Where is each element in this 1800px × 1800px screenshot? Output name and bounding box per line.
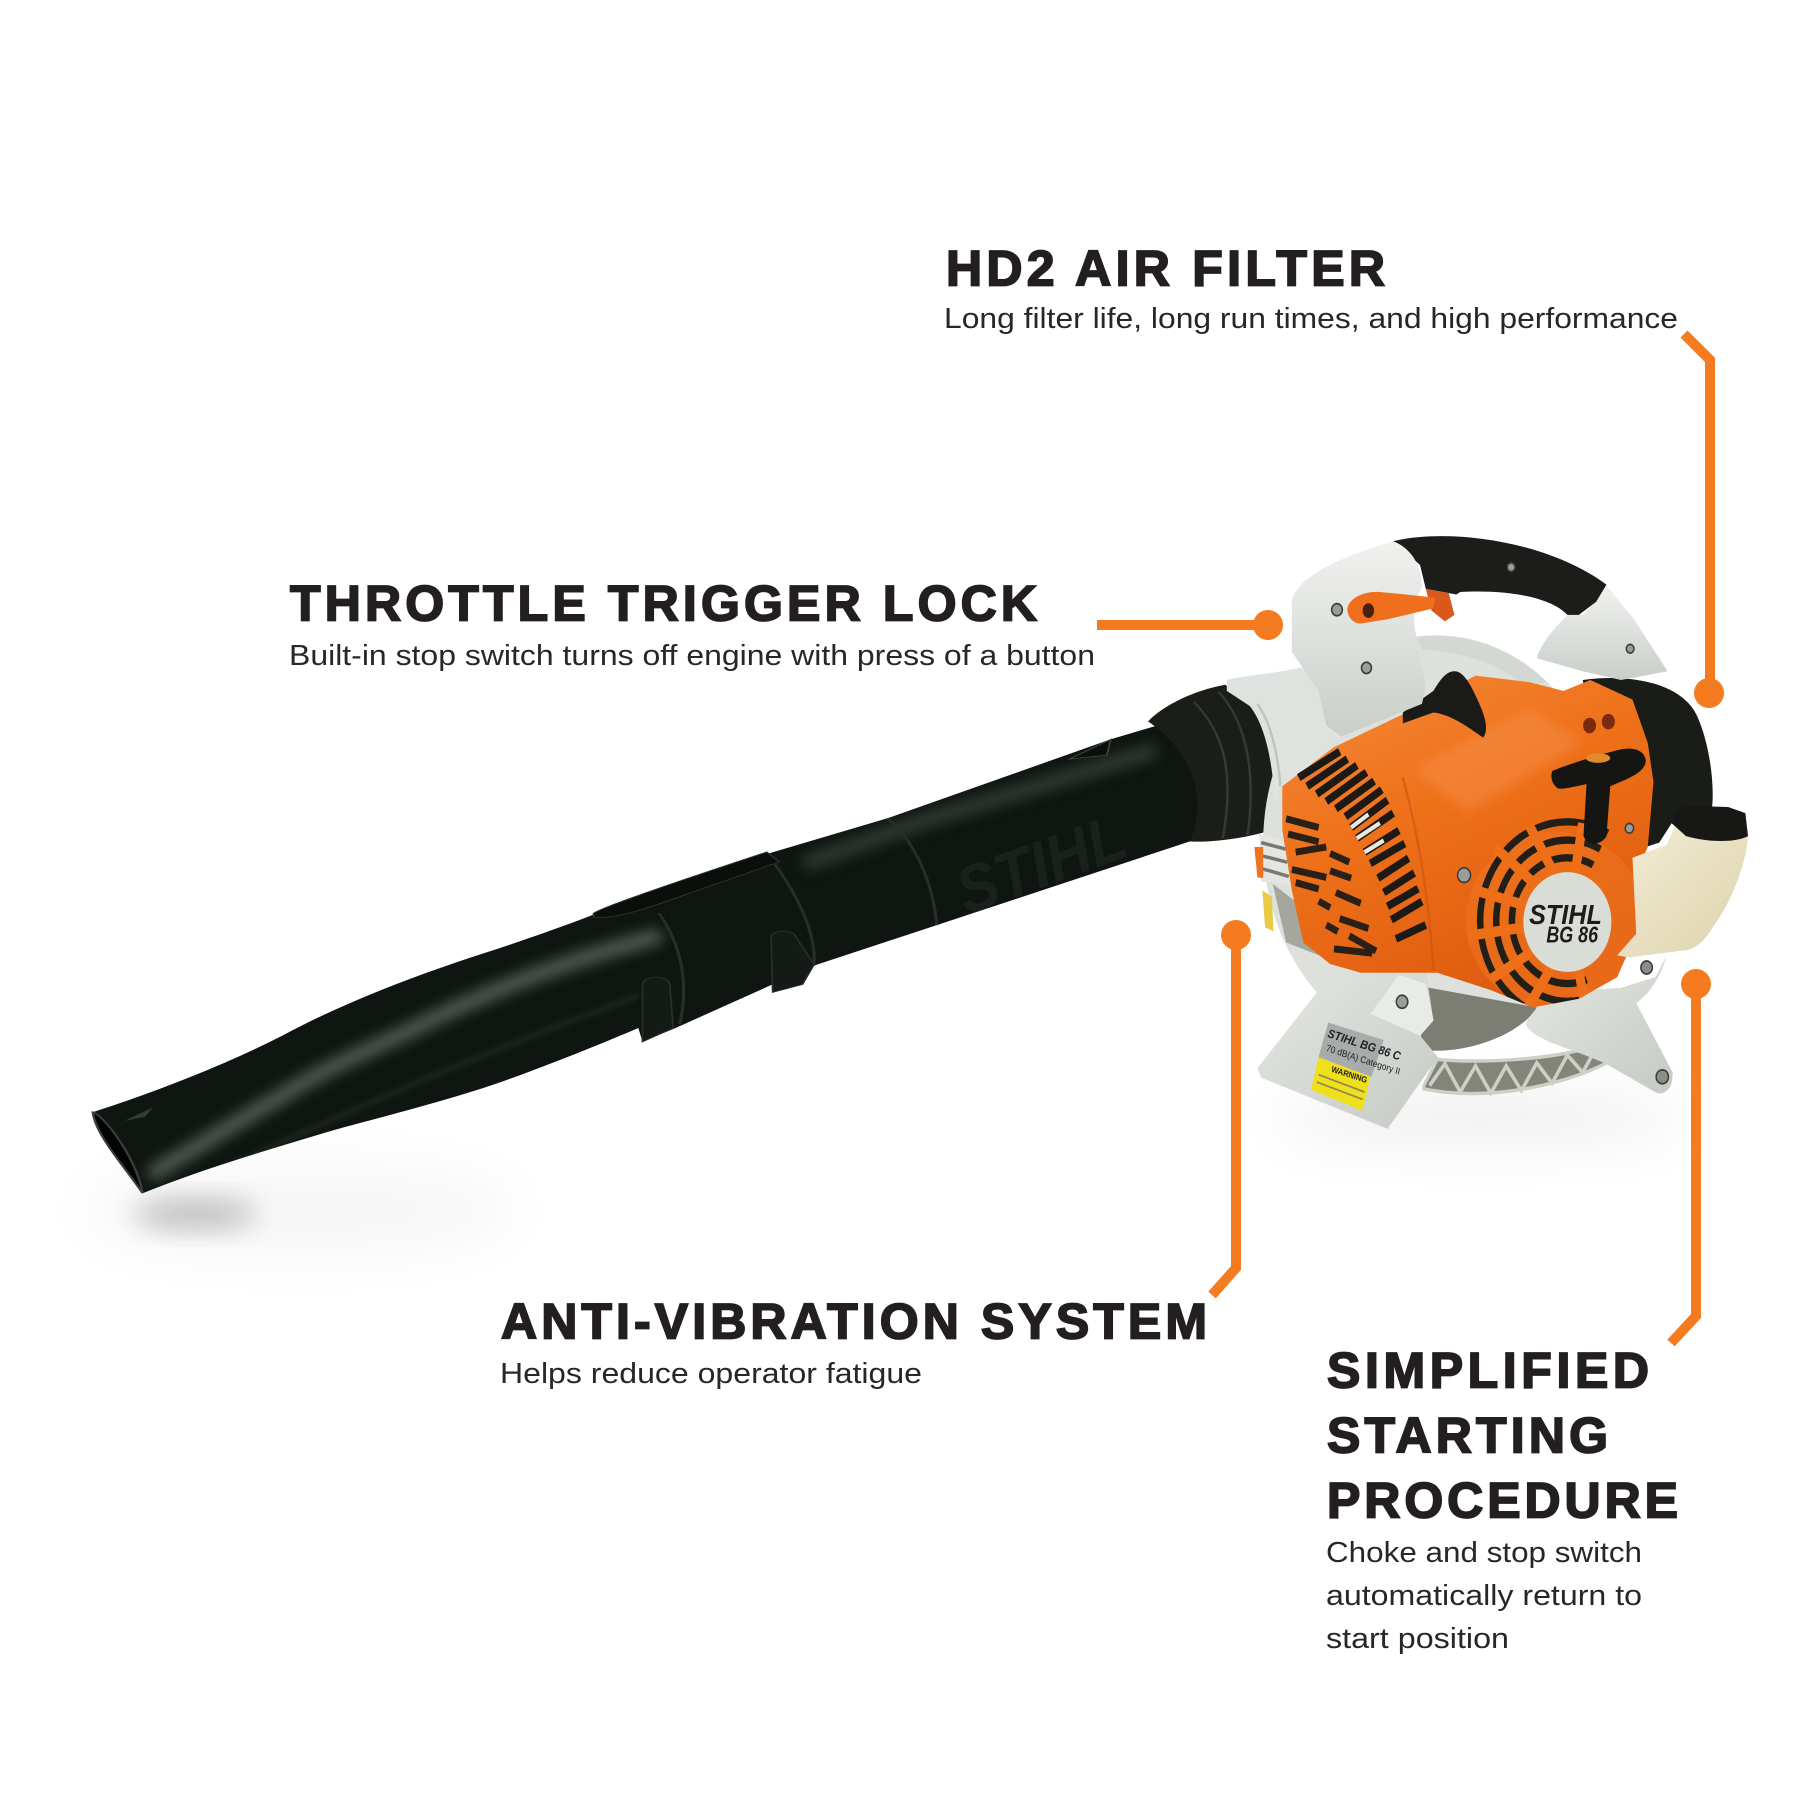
warning decal: STIHL BG 86 C: [1326, 1028, 1402, 1064]
nozzle mark: [124, 1107, 153, 1121]
starter cover badge: [1523, 872, 1611, 972]
engine rear shroud: [1583, 678, 1713, 851]
stand truss: [1424, 1041, 1619, 1094]
callout line: HD2 air filter: [1684, 334, 1724, 708]
heading: anti-vibration system: ANTI-VIBRATION SYSTEM: [501, 1294, 1207, 1350]
starter handle: [1551, 749, 1646, 843]
warning decal: [1311, 1023, 1402, 1111]
blower tube: [93, 685, 1276, 1193]
engine feet and stand: [1257, 955, 1673, 1129]
heading: simplified starting procedure: STARTING: [1327, 1408, 1608, 1464]
housing highlight: [1414, 708, 1583, 812]
rear handle support: [1537, 585, 1668, 680]
volute rim top: [1416, 635, 1546, 686]
foot bracket: [1370, 975, 1433, 1036]
tube sleeve seams: [659, 818, 937, 1024]
lower volute interior: [1418, 986, 1537, 1051]
description: simplified starting procedure: automatically return to: [1326, 1580, 1642, 1612]
volute disc: [1263, 635, 1611, 1050]
black choke knob: [1403, 671, 1486, 738]
embossed arrow: [1069, 739, 1111, 759]
blower engine: [1227, 536, 1748, 1129]
callout: HD2 air filter: [944, 240, 1678, 335]
sleeve rail: [594, 852, 779, 918]
tube collar: [1148, 685, 1276, 842]
heading: simplified starting procedure: [1327, 1342, 1678, 1528]
neck connector: [1227, 667, 1361, 804]
warning decal: WARNING: [1330, 1064, 1368, 1085]
heading: throttle trigger lock: THROTTLE TRIGGER LOCK: [290, 576, 1037, 632]
description: simplified starting procedure: Choke and stop switch: [1326, 1537, 1642, 1569]
description: simplified starting procedure: [1326, 1537, 1642, 1655]
front handle housing: [1292, 541, 1426, 736]
callout: simplified starting procedure: [1326, 1342, 1678, 1655]
right foot: [1525, 955, 1673, 1093]
description: throttle trigger lock: Built-in stop switch turns off engine with press of a button: [289, 640, 1095, 672]
tube body: [93, 720, 1227, 1193]
housing edge shading: [1403, 778, 1433, 971]
black handle grip: [1393, 536, 1606, 615]
screws: [1332, 563, 1668, 1084]
housing holes: [1583, 714, 1615, 733]
tube highlights: [155, 752, 1150, 1172]
callout line: throttle trigger lock: [1097, 610, 1283, 640]
starter grille: [1476, 818, 1610, 1008]
shadow under nozzle: [80, 1165, 520, 1255]
sleeve clips: [642, 931, 814, 1042]
fuel cap: [1671, 806, 1748, 841]
collar ribs: [1194, 692, 1251, 838]
callout: anti-vibration system: [500, 1294, 1207, 1390]
description: HD2 air filter: Long filter life, long run times, and high performance: [944, 303, 1678, 335]
lower left grille: [1286, 819, 1376, 953]
side cooling fins: [1254, 834, 1330, 960]
description: simplified starting procedure: start position: [1326, 1623, 1509, 1655]
starter cover badge: STIHL: [1529, 899, 1602, 931]
description: anti-vibration system: Helps reduce operator fatigue: [500, 1358, 922, 1390]
upper vent slats: [1299, 752, 1426, 939]
throttle trigger lock: [1347, 592, 1435, 624]
fuel tank: [1617, 827, 1748, 958]
left foot: [1257, 971, 1438, 1129]
main orange housing: [1282, 676, 1653, 1007]
heading: HD2 air filter: HD2 AIR FILTER: [946, 240, 1385, 296]
heading: simplified starting procedure: PROCEDURE: [1327, 1472, 1678, 1528]
nozzle mouth: [93, 1112, 143, 1193]
warning decal: 70 dB(A) Category II: [1325, 1043, 1401, 1077]
callout line: simplified starting procedure: [1671, 969, 1711, 1343]
starter dome edge: [1466, 848, 1636, 1007]
vent reflections: [1351, 814, 1384, 852]
shadow under engine: [1270, 1096, 1690, 1140]
callout: throttle trigger lock: [289, 576, 1095, 672]
starter cover badge: BG 86: [1546, 921, 1599, 948]
callout line: anti-vibration system: [1212, 920, 1251, 1295]
embossed tube logo: STIHL: [946, 799, 1136, 928]
heading: simplified starting procedure: SIMPLIFIED: [1327, 1342, 1649, 1398]
throttle trigger teeth: [1426, 589, 1454, 621]
